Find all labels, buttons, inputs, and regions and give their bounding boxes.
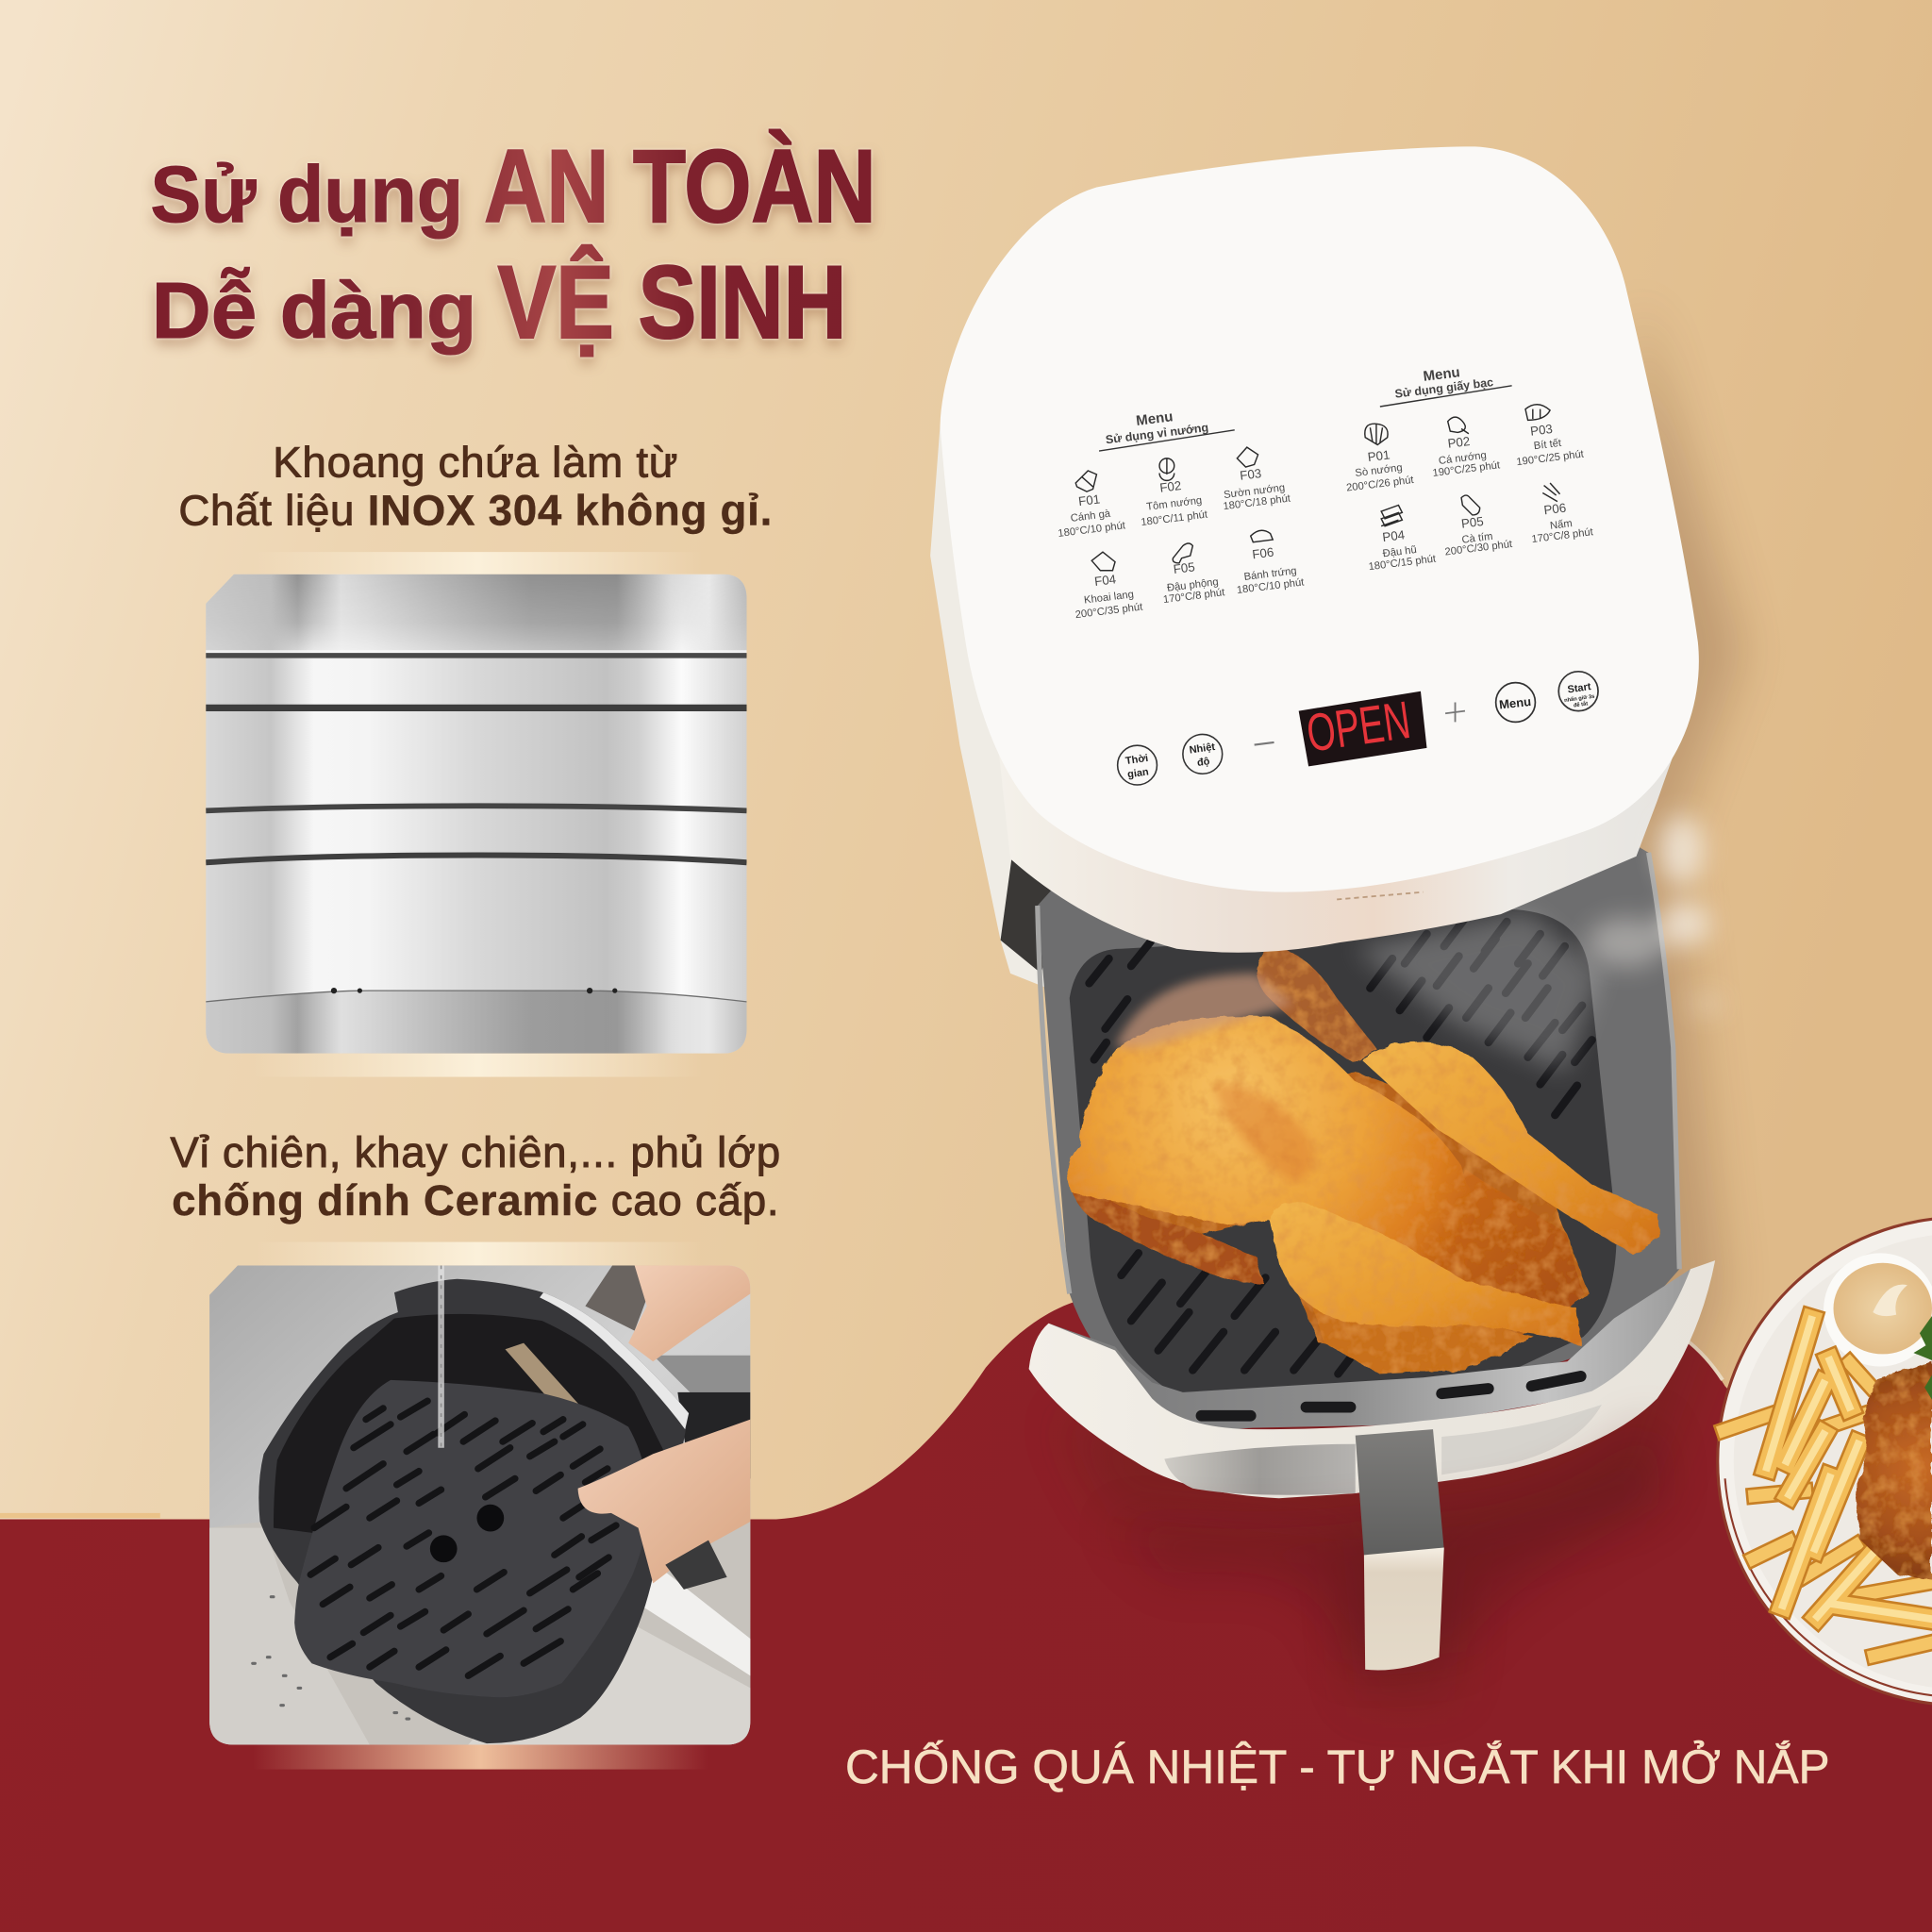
drawer front [1029,1260,1715,1498]
button: start: Start [1567,681,1592,695]
button: start: nhấn giữ 3s [1564,693,1595,704]
button: temperature: Nhiệt [1189,741,1216,757]
control menu: foil: 190°C/25 phút [1432,459,1502,479]
lid lip [998,734,1681,953]
breast [1069,1016,1474,1271]
control menu: grill rack: 180°C/11 phút [1141,508,1209,528]
handle [1356,1429,1444,1671]
control menu: grill rack: F05 [1173,559,1195,576]
right leg [1361,1041,1661,1255]
control menu: foil: Nấm [1549,518,1573,532]
lid top [941,146,1699,892]
LED display [1299,690,1426,766]
LED display: OPEN [1303,690,1414,763]
grill slots [1090,917,1592,1374]
control menu: foil: Cà tím [1461,531,1493,546]
button: start [1558,672,1598,711]
title: VỆ SINH [498,245,846,360]
button: temperature [1183,734,1223,774]
control menu: grill rack: 200°C/35 phút [1074,601,1144,621]
basket outer wall [1038,825,1679,1429]
bottom caption: CHỐNG QUÁ NHIỆT - TỰ NGẮT KHI MỞ NẮP [845,1740,1830,1793]
control menu: grill rack: 180°C/18 phút [1223,492,1292,512]
control menu: foil: P04 [1382,527,1406,544]
control menu: foil: Bít tết [1533,438,1563,452]
parsley [1913,1316,1932,1400]
button: time: Thời [1124,753,1149,767]
control menu: foil: P03 [1529,422,1554,439]
control menu: grill rack: F06 [1251,545,1274,561]
title: Sử dụng [150,149,463,239]
control menu: foil: 200°C/26 phút [1345,475,1415,494]
control menu: foil: 180°C/15 phút [1368,553,1438,573]
control menu: foil: Sử dụng giấy bạc [1394,375,1494,401]
text block: stainless chamber: Chất liệu INOX 304 không gỉ. [178,486,773,534]
control menu: foil: P02 [1447,434,1471,451]
fries [1724,1320,1932,1656]
control menu: foil: 170°C/8 phút [1531,526,1594,545]
roast chicken [1069,946,1661,1374]
text block: ceramic coating: chống dính Ceramic cao cấp. [172,1176,779,1224]
left wing [1070,1171,1264,1284]
plate [1718,1217,1932,1706]
control menu: foil: 190°C/25 phút [1516,448,1585,468]
fried chicken piece [1855,1361,1932,1579]
steam over chicken [1115,974,1293,1047]
control menu: grill rack: 170°C/8 phút [1162,587,1226,606]
control menu: foil [1345,364,1594,573]
button: time: gian [1126,766,1150,780]
control menu: grill rack: Khoai lang [1083,589,1135,607]
button: plus [1445,702,1465,722]
control menu: foil: Sò nướng [1355,462,1403,479]
control menu: grill rack: F01 [1077,491,1101,508]
control menu: foil: Menu [1423,364,1461,385]
title: Dễ dàng [152,265,476,355]
bottom leg [1269,1202,1581,1345]
button: menu: Menu [1498,694,1532,711]
title [150,129,876,360]
plate of fries and fried chicken [1718,1217,1932,1706]
drawer inner rim with vents [1049,1269,1690,1429]
control panel: buttons and display [1118,672,1598,785]
shadow beneath drawer [1109,1417,1663,1663]
lower mass [1417,1171,1585,1321]
steam [1587,816,1724,1015]
control menu: grill rack: 180°C/10 phút [1058,520,1126,540]
drawer windows [1164,1444,1356,1495]
control menu: grill rack: F03 [1239,466,1262,483]
control menu: grill rack: Tôm nướng [1146,495,1203,513]
button: minus [1255,742,1274,745]
control menu: grill rack: Bánh trứng [1243,565,1297,583]
control menu: grill rack [1058,408,1306,621]
text block: ceramic coating: Vỉ chiên, khay chiên,... phủ lớp [170,1128,781,1176]
fryer body [930,425,1109,989]
control menu: grill rack: Menu [1135,408,1174,429]
control menu: grill rack: Sườn nướng [1223,482,1286,501]
control menu: grill rack: Sử dụng vỉ nướng [1105,421,1209,446]
control menu: foil: P06 [1543,501,1567,517]
control menu: grill rack: F02 [1159,478,1182,495]
dark cavity opening [1001,858,1062,974]
control menu: grill rack: Đậu phộng [1166,576,1219,594]
panel: stainless steel photo [206,552,747,1077]
background: dark red wave [0,1293,1932,1932]
button: menu [1496,683,1535,722]
grill plate [1070,909,1617,1398]
text block: stainless chamber: Khoang chứa làm từ [273,438,678,486]
control menu: foil: Đậu hũ [1382,544,1417,559]
air fryer [930,146,1724,1671]
control menu: foil: P05 [1460,514,1484,531]
panel: washing ceramic tray photo [209,1242,750,1770]
sauce cup [1824,1253,1932,1366]
button: time [1118,745,1157,785]
shadow: fryer on background [1059,295,1743,1700]
steam haze on grill [1356,912,1602,1072]
control menu: grill rack: Cánh gà [1070,508,1111,525]
title: AN TOÀN [484,129,876,244]
control menu: grill rack: F04 [1093,572,1117,589]
rear wing [1257,946,1377,1062]
control menu: foil: Cá nướng [1438,450,1487,467]
control menu: foil: P01 [1367,447,1391,464]
button: start: để tắt [1573,700,1589,708]
chicken underside [1084,1072,1590,1368]
control menu: foil: 200°C/30 phút [1444,539,1514,558]
button: temperature: độ [1196,756,1210,769]
control menu: grill rack: 180°C/10 phút [1236,576,1306,596]
